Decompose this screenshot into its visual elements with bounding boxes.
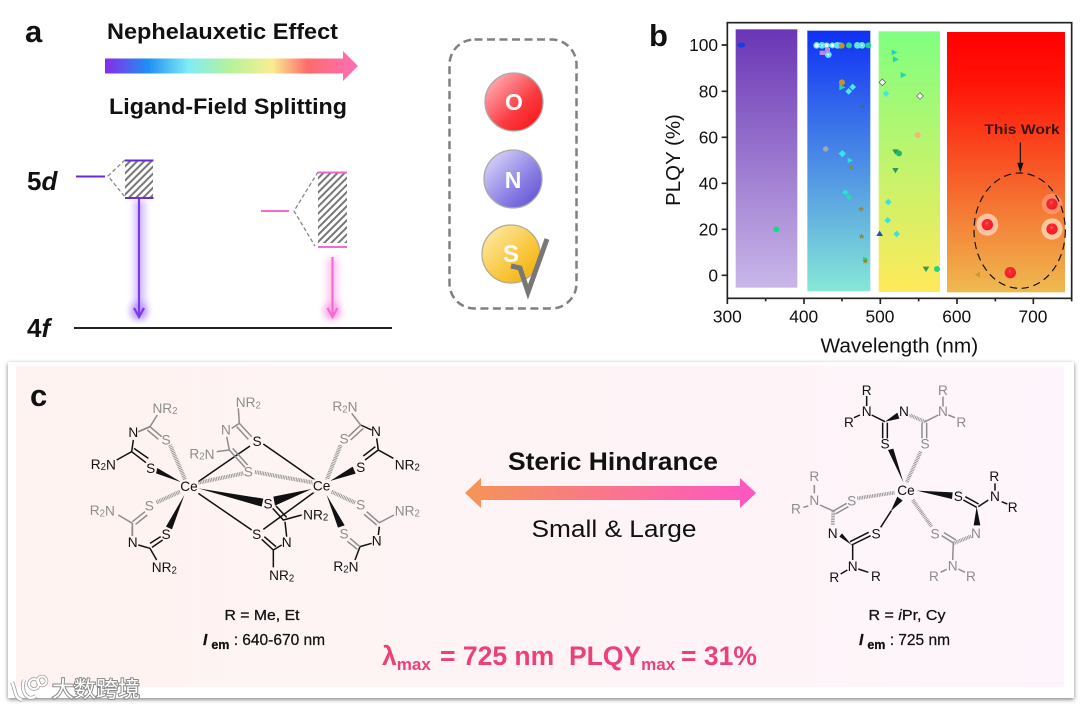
atom S: S [503,241,519,268]
y axis tick labels: 40 [699,173,718,193]
black atom labels: 2 [289,573,294,584]
gray atom labels: S [920,436,930,451]
watermark text: 大数跨境 [52,672,140,704]
gray atom labels: S [161,432,171,447]
black bonds [117,425,393,567]
black atom labels: S [880,436,890,451]
right molecule caption: em [867,638,885,652]
gray atom labels: R [956,415,966,430]
x axis tick labels: 400 [789,306,818,326]
black atom labels [828,383,1018,585]
y axis tick labels: 60 [699,127,718,147]
literature data points [737,42,980,277]
gray atom labels: R [966,569,976,584]
gray atom labels: R [809,469,819,484]
result: max wavelength and PLQY: PLQY [569,641,641,671]
gray atom labels: N [809,493,819,508]
black atom labels: Ce [313,478,330,493]
black atom labels: S [954,489,963,504]
x axis title: Wavelength (nm) [820,335,978,358]
black atom labels: R [844,415,854,430]
left molecule caption: em [211,638,229,652]
gray atom labels: NR [236,395,256,410]
dashed ellipse around this work [974,173,1065,288]
annotation arrow [1018,142,1023,171]
text: Small & Large: Small & Large [532,516,696,543]
4f ground level line [74,327,392,329]
black atom labels [91,424,420,584]
gray atom labels: S [847,493,856,508]
gray atom labels: S [356,497,365,512]
left molecule caption [203,608,325,652]
atom S [482,225,540,283]
black atom labels: N [371,424,381,439]
gray atom labels: 2 [199,451,205,462]
panel label a: a [25,14,43,49]
black atom labels: 2 [323,512,328,523]
y axis tick labels: 100 [689,35,718,55]
gray atom labels: R [90,503,100,518]
gray atom labels [791,383,981,584]
black atom labels: Ce [180,479,198,494]
atom N: N [505,167,521,193]
rainbow arrow [105,51,358,81]
gray atom labels: R [938,383,948,398]
pink emission arrow [324,257,342,320]
panel label b: b [649,18,668,53]
black atom labels: S [871,526,881,541]
gray atom labels: 2 [256,400,261,411]
black atom labels: NR [395,457,415,472]
gray atom labels: N [105,503,115,518]
y axis tick labels: 20 [699,219,718,239]
label 5d: 5d [27,166,58,196]
panel b: PLQY chart [649,18,1072,358]
panel label c: c [30,378,47,413]
left molecule caption: I [203,632,208,649]
black atom labels: S [252,434,262,449]
black atom labels: 2 [101,461,106,472]
black atom labels: S [356,460,365,475]
right molecule caption [859,608,950,652]
black atom labels: N [106,457,116,472]
gray atom labels: R [929,569,939,584]
label 4f: 4f [27,313,52,343]
wedge bonds [839,413,980,545]
hashed bonds [833,415,972,543]
watermark [12,672,140,704]
y axis tick labels: 80 [699,81,718,101]
double-headed gradient arrow [465,478,756,508]
gray atom labels: 2 [342,404,348,415]
right molecule caption: : 725 nm [885,632,950,649]
black atom labels: 2 [172,565,177,576]
black atom labels: N [899,404,909,419]
pink 5d level splitting [261,172,347,247]
x axis tick labels: 300 [713,306,742,326]
gray atom labels: N [348,399,358,414]
dimer molecule structure [90,395,420,584]
gray atom labels: 2 [172,405,178,416]
right molecule caption: I [859,632,864,649]
right molecule caption: R = iPr, Cy [868,608,946,624]
hashed bonds [156,445,355,503]
x axis tick labels: 500 [866,306,894,326]
x axis tick labels: 600 [942,306,971,326]
atom N [484,150,542,208]
result: max wavelength and PLQY: = 725 nm [440,641,554,671]
black atom labels: 2 [343,564,349,575]
black bonds [841,396,1007,574]
black atom labels: NR [152,560,172,575]
gray atom labels: S [339,526,349,541]
left molecule caption: : 640-670 nm [229,632,325,649]
gray atom labels: N [938,404,948,419]
check mark [511,239,547,292]
black atom labels: NR [303,507,323,522]
y axis title: PLQY (%) [663,114,685,206]
black atom labels: N [349,559,359,574]
text: Steric Hindrance: Steric Hindrance [508,448,718,476]
gray atom labels: S [244,464,253,479]
atom O [485,73,543,131]
panel card [8,362,1074,698]
black atom labels: 2 [415,462,420,473]
black atom labels: R [862,383,872,398]
this work: highlighted data points [976,194,1063,278]
black atom labels: R [91,457,101,472]
black atom labels: N [828,526,838,541]
black atom labels: S [161,527,171,542]
black atom labels: R [1008,500,1018,515]
black atom labels: S [146,461,155,476]
black atom labels: N [128,425,138,440]
result: max wavelength and PLQY: λ [382,641,397,671]
black atom labels: S [252,527,261,542]
black atom labels: N [282,535,292,550]
chart [663,23,1072,358]
black atom labels: N [848,559,858,574]
black atom labels: R [989,469,999,484]
result: max wavelength and PLQY: = 31% [681,641,757,671]
annotation: This Work: This Work [984,121,1060,137]
gray atom labels: S [339,431,349,446]
x axis tick labels [713,306,1047,326]
result: max wavelength and PLQY: max [641,655,676,674]
black atom labels: N [128,535,138,550]
dashed rounded box [450,40,576,308]
y axis tick labels [689,35,718,285]
watermark logo [12,676,46,700]
panel a: energy level diagram [25,14,392,343]
gray atom labels: R [189,446,199,461]
gray atom labels: N [971,526,981,541]
gray atom labels: NR [395,503,415,518]
gray atom labels: N [221,422,231,437]
heading: Nephelauxetic Effect: Nephelauxetic Effect [107,19,339,44]
panel c: steric hindrance comparison [8,362,1074,698]
black atom labels: Ce [897,483,915,498]
y axis tick labels: 0 [708,265,718,285]
spectral colour bands [736,29,1065,292]
panel: O N S ligand atoms [450,40,576,308]
gray atom labels: NR [152,401,172,416]
black atom labels: S [263,496,273,511]
result: max wavelength and PLQY: max [397,655,431,674]
x axis tick labels: 700 [1019,306,1047,326]
gray atom labels: N [948,558,958,573]
heading: Ligand-Field Splitting: Ligand-Field Splitting [109,94,347,119]
gray bonds [803,397,965,572]
gray atom labels [90,395,420,541]
wedge bonds [156,467,356,529]
purple 5d level splitting [76,160,154,198]
gray atom labels: R [332,399,342,414]
gray atom labels: 2 [100,508,105,519]
black atom labels: R [829,570,839,585]
axes frame and ticks [722,23,1072,304]
gray bonds [118,408,394,549]
monomer molecule structure [791,383,1018,585]
black atom labels: R [871,569,881,584]
gray atom labels: S [930,526,940,541]
black atom labels: NR [269,568,289,583]
purple emission arrow [130,199,148,320]
black atom labels: R [333,559,343,574]
black atom labels: N [990,489,1000,504]
atom O: O [505,89,523,115]
black atom labels: N [372,533,382,548]
left molecule caption: R = Me, Et [224,608,300,624]
gray atom labels: S [145,498,154,513]
gray atom labels: N [205,446,215,461]
gray atom labels: 2 [415,508,420,519]
gray atom labels: R [791,501,801,516]
black atom labels: N [862,404,872,419]
